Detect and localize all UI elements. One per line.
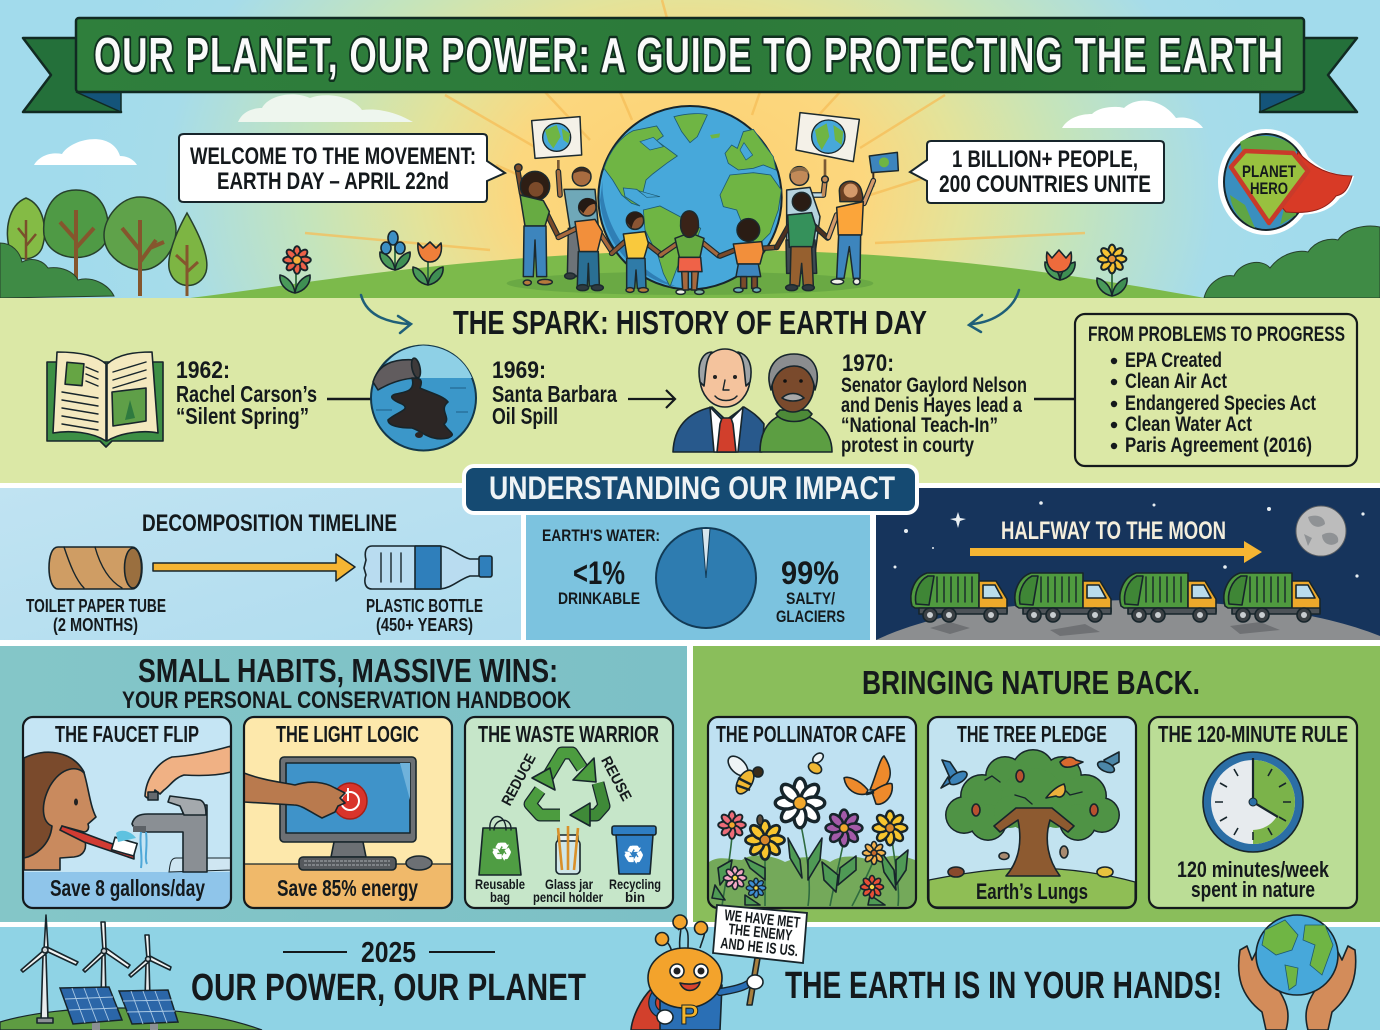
callout: welcome bubble: WELCOME TO THE MOVEMENT: [190, 143, 476, 170]
flower: red [280, 246, 311, 293]
card: the light logic [244, 717, 452, 908]
card: the light logic: THE LIGHT LOGIC [276, 721, 419, 747]
icon: recycling bin [612, 826, 656, 874]
card: the waste warrior: Glass jar [545, 876, 593, 892]
panel: title banner [23, 18, 1357, 112]
text block: 1962: Rachel Carson’s [176, 381, 317, 407]
right bushes [1204, 226, 1380, 298]
icon: recycling symbol [530, 753, 604, 826]
icon: open book [47, 352, 163, 447]
hill [190, 250, 1205, 298]
card: the waste warrior: REUSE [597, 754, 635, 804]
cloud [238, 94, 413, 122]
panel: Earth's water [526, 488, 870, 640]
heading: THE SPARK: HISTORY OF EARTH DAY [453, 304, 927, 341]
icon: big tree [945, 749, 1120, 876]
card: the waste warrior: REDUCE [498, 751, 540, 809]
callout: participation bubble: 200 COUNTRIES UNITE [939, 171, 1151, 198]
panel: halfway to the moon: HALFWAY TO THE MOON [1001, 517, 1226, 545]
text block: 1970: “National Teach-In” [841, 414, 998, 437]
icon: toilet paper tube [49, 547, 142, 589]
panel: footer [0, 905, 1380, 1030]
panel: Earth's water: EARTH'S WATER: [542, 526, 660, 545]
icon: faucet and hand [132, 746, 231, 872]
child: orange shirt [558, 198, 613, 291]
panel: decomposition timeline: (2 MONTHS) [53, 615, 138, 635]
icon: mascot with sign [631, 905, 807, 1030]
panel: halfway to the moon [876, 488, 1380, 640]
arrow: to 1970 [628, 390, 675, 408]
sun rays [305, 0, 1085, 250]
icon: garbage trucks [911, 573, 1320, 622]
text block: 1962: “Silent Spring” [176, 403, 309, 429]
callout: participation bubble: 1 BILLION+ PEOPLE, [952, 146, 1138, 173]
icon: ground insects [948, 846, 1113, 877]
panel: small habits: YOUR PERSONAL CONSERVATION HANDBOOK [122, 687, 572, 714]
panel: Earth's water: <1% [573, 555, 625, 591]
panel: small habits [0, 646, 687, 922]
text block: 1970: protest in courty [841, 434, 974, 457]
card: the faucet flip: THE FAUCET FLIP [55, 721, 199, 747]
arrow: curved left [361, 295, 411, 333]
callout: welcome bubble: EARTH DAY – APRIL 22nd [217, 168, 449, 195]
text block: 1962 [176, 357, 317, 429]
cloud [1062, 101, 1203, 128]
card: the waste warrior: Reusable [475, 876, 525, 892]
icon: founders portraits [673, 349, 832, 452]
icon: flower meadow [712, 778, 908, 906]
person: woman with flag [828, 152, 898, 285]
mascot cape [631, 988, 706, 1030]
icon: hand pressing button [244, 773, 345, 818]
panel: small habits: SMALL HABITS, MASSIVE WINS: [138, 652, 558, 689]
panel: Earth's water: DRINKABLE [558, 589, 640, 608]
child: yellow shirt [612, 212, 662, 292]
icon: person brushing teeth [24, 752, 137, 870]
child: girl with red shorts [661, 211, 719, 294]
text: earth in your hands: THE EARTH IS IN YOUR HANDS! [785, 965, 1222, 1007]
child: green shirt [777, 192, 828, 291]
card: the waste warrior [465, 717, 673, 908]
panel: Earth's water: GLACIERS [776, 607, 845, 626]
banner right ribbon tail [1260, 38, 1357, 112]
heading: understanding our impact [464, 466, 917, 513]
text block: 1969 [492, 357, 617, 429]
panel: from problems to progress: Clean Air Act [1125, 370, 1227, 393]
icon: oil spill [371, 346, 476, 450]
card: the waste warrior: pencil holder [533, 889, 603, 905]
mascot head and body [662, 923, 705, 952]
icon: glass jar with pencils [556, 826, 580, 874]
card: the pollinator cafe [708, 717, 916, 908]
icon: planet hero badge: PLANET [1242, 162, 1296, 181]
chart: water pie [656, 528, 756, 628]
heading: understanding our impact: UNDERSTANDING OUR IMPACT [489, 470, 895, 506]
panel: decomposition timeline [0, 488, 521, 640]
panel: from problems to progress [1075, 314, 1357, 466]
panel: bringing nature back [693, 646, 1380, 922]
icon: monarch butterfly [844, 756, 892, 804]
icon: recycling bin: ♻ [623, 842, 645, 869]
flower: blue [380, 231, 410, 270]
flower: yellow right [1097, 245, 1127, 296]
card: the waste warrior: bag [490, 889, 510, 905]
flower: tulip right [1045, 250, 1075, 280]
panel: Earth's water: 99% [781, 555, 839, 591]
panel: bringing nature back: BRINGING NATURE BACK. [862, 664, 1200, 701]
card: the tree pledge [928, 717, 1136, 908]
card: the tree pledge: THE TREE PLEDGE [957, 721, 1107, 747]
text block: 1969: 1969: [492, 357, 546, 384]
arrow: trucks to moon [970, 541, 1262, 563]
mascot sign pole [747, 958, 760, 1005]
panel: Earth's water: SALTY/ [786, 589, 835, 608]
icon: reusable bag [479, 816, 521, 875]
banner left ribbon tail [23, 38, 121, 112]
icon: mascot with sign: P [680, 999, 699, 1030]
text block: 1962: 1962: [176, 357, 230, 384]
card: the tree pledge: Earth’s Lungs [976, 879, 1088, 904]
panel: decomposition timeline: PLASTIC BOTTLE [366, 596, 483, 616]
icon: plastic bottle [364, 546, 492, 589]
icon: bees [725, 751, 825, 825]
mascot sign: WE HAVE MET [724, 907, 801, 932]
card: the waste warrior: bin [625, 889, 645, 905]
card: the 120-minute rule: 120 minutes/week [1177, 857, 1330, 882]
card: the 120-minute rule [1149, 717, 1357, 908]
panel: decomposition timeline: DECOMPOSITION TIMELINE [142, 510, 397, 537]
text: year 2025: 2025 [361, 937, 416, 969]
callout: welcome bubble [179, 134, 505, 202]
mascot sign: THE ENEMY [728, 921, 793, 945]
child: girl with blue skirt [720, 219, 777, 292]
card: the pollinator cafe: THE POLLINATOR CAFE [716, 721, 906, 747]
icon: clock [1203, 752, 1303, 852]
text block: 1970: 1970: [842, 350, 894, 377]
icon: moon [1296, 506, 1346, 556]
icon: hands holding earth [1239, 915, 1356, 1030]
text: our power our planet: OUR POWER, OUR PLANET [191, 967, 586, 1009]
left trees [0, 190, 207, 298]
card: the 120-minute rule: spent in nature [1191, 877, 1315, 902]
globe [598, 106, 782, 289]
icon: birds [941, 752, 1119, 788]
panel: from problems to progress: Paris Agreement (2016) [1125, 434, 1312, 457]
panel: from problems to progress: Endangered Species Act [1125, 392, 1316, 415]
text block: 1970: and Denis Hayes lead a [841, 394, 1022, 417]
person: woman raising fist [515, 164, 558, 285]
mascot sign [713, 905, 807, 963]
person: man with left sign [532, 117, 598, 279]
panel: decomposition timeline: TOILET PAPER TUBE [26, 596, 166, 616]
icon: reusable bag: ♻ [491, 839, 513, 866]
text block: 1969: Santa Barbara [492, 381, 617, 407]
card: the light logic: Save 85% energy [277, 875, 418, 901]
panel: decomposition timeline: (450+ YEARS) [376, 615, 473, 635]
icon: planet hero badge [1218, 129, 1354, 235]
card: the faucet flip: Save 8 gallons/day [50, 875, 205, 901]
icon: computer with power button [280, 757, 432, 870]
card: the waste warrior: Recycling [609, 876, 661, 892]
text block: 1970 [841, 350, 1027, 457]
panel: from problems to progress: EPA Created [1125, 349, 1222, 372]
mascot sign: AND HE IS US. [720, 935, 799, 960]
icon: planet hero badge: HERO [1250, 179, 1288, 198]
card: the faucet flip [23, 717, 231, 908]
text block: 1969: Oil Spill [492, 403, 558, 429]
callout: participation bubble [910, 141, 1164, 203]
text block: 1970: Senator Gaylord Nelson [841, 374, 1027, 397]
icon: wind turbines [21, 915, 171, 1023]
card: the waste warrior: THE WASTE WARRIOR [478, 721, 659, 747]
arrow: tube to bottle [153, 554, 355, 581]
panel: from problems to progress: Clean Water Act [1125, 413, 1252, 436]
panel: hero with sky and globe [0, 0, 1380, 298]
arrow: curved right [969, 290, 1019, 332]
flower: tulip [413, 242, 443, 285]
person: man with right sign [786, 113, 859, 273]
globe and people illustration [507, 106, 898, 295]
icon: solar panels [60, 987, 178, 1030]
panel: history of Earth Day [0, 290, 1380, 483]
cloud [34, 139, 137, 165]
